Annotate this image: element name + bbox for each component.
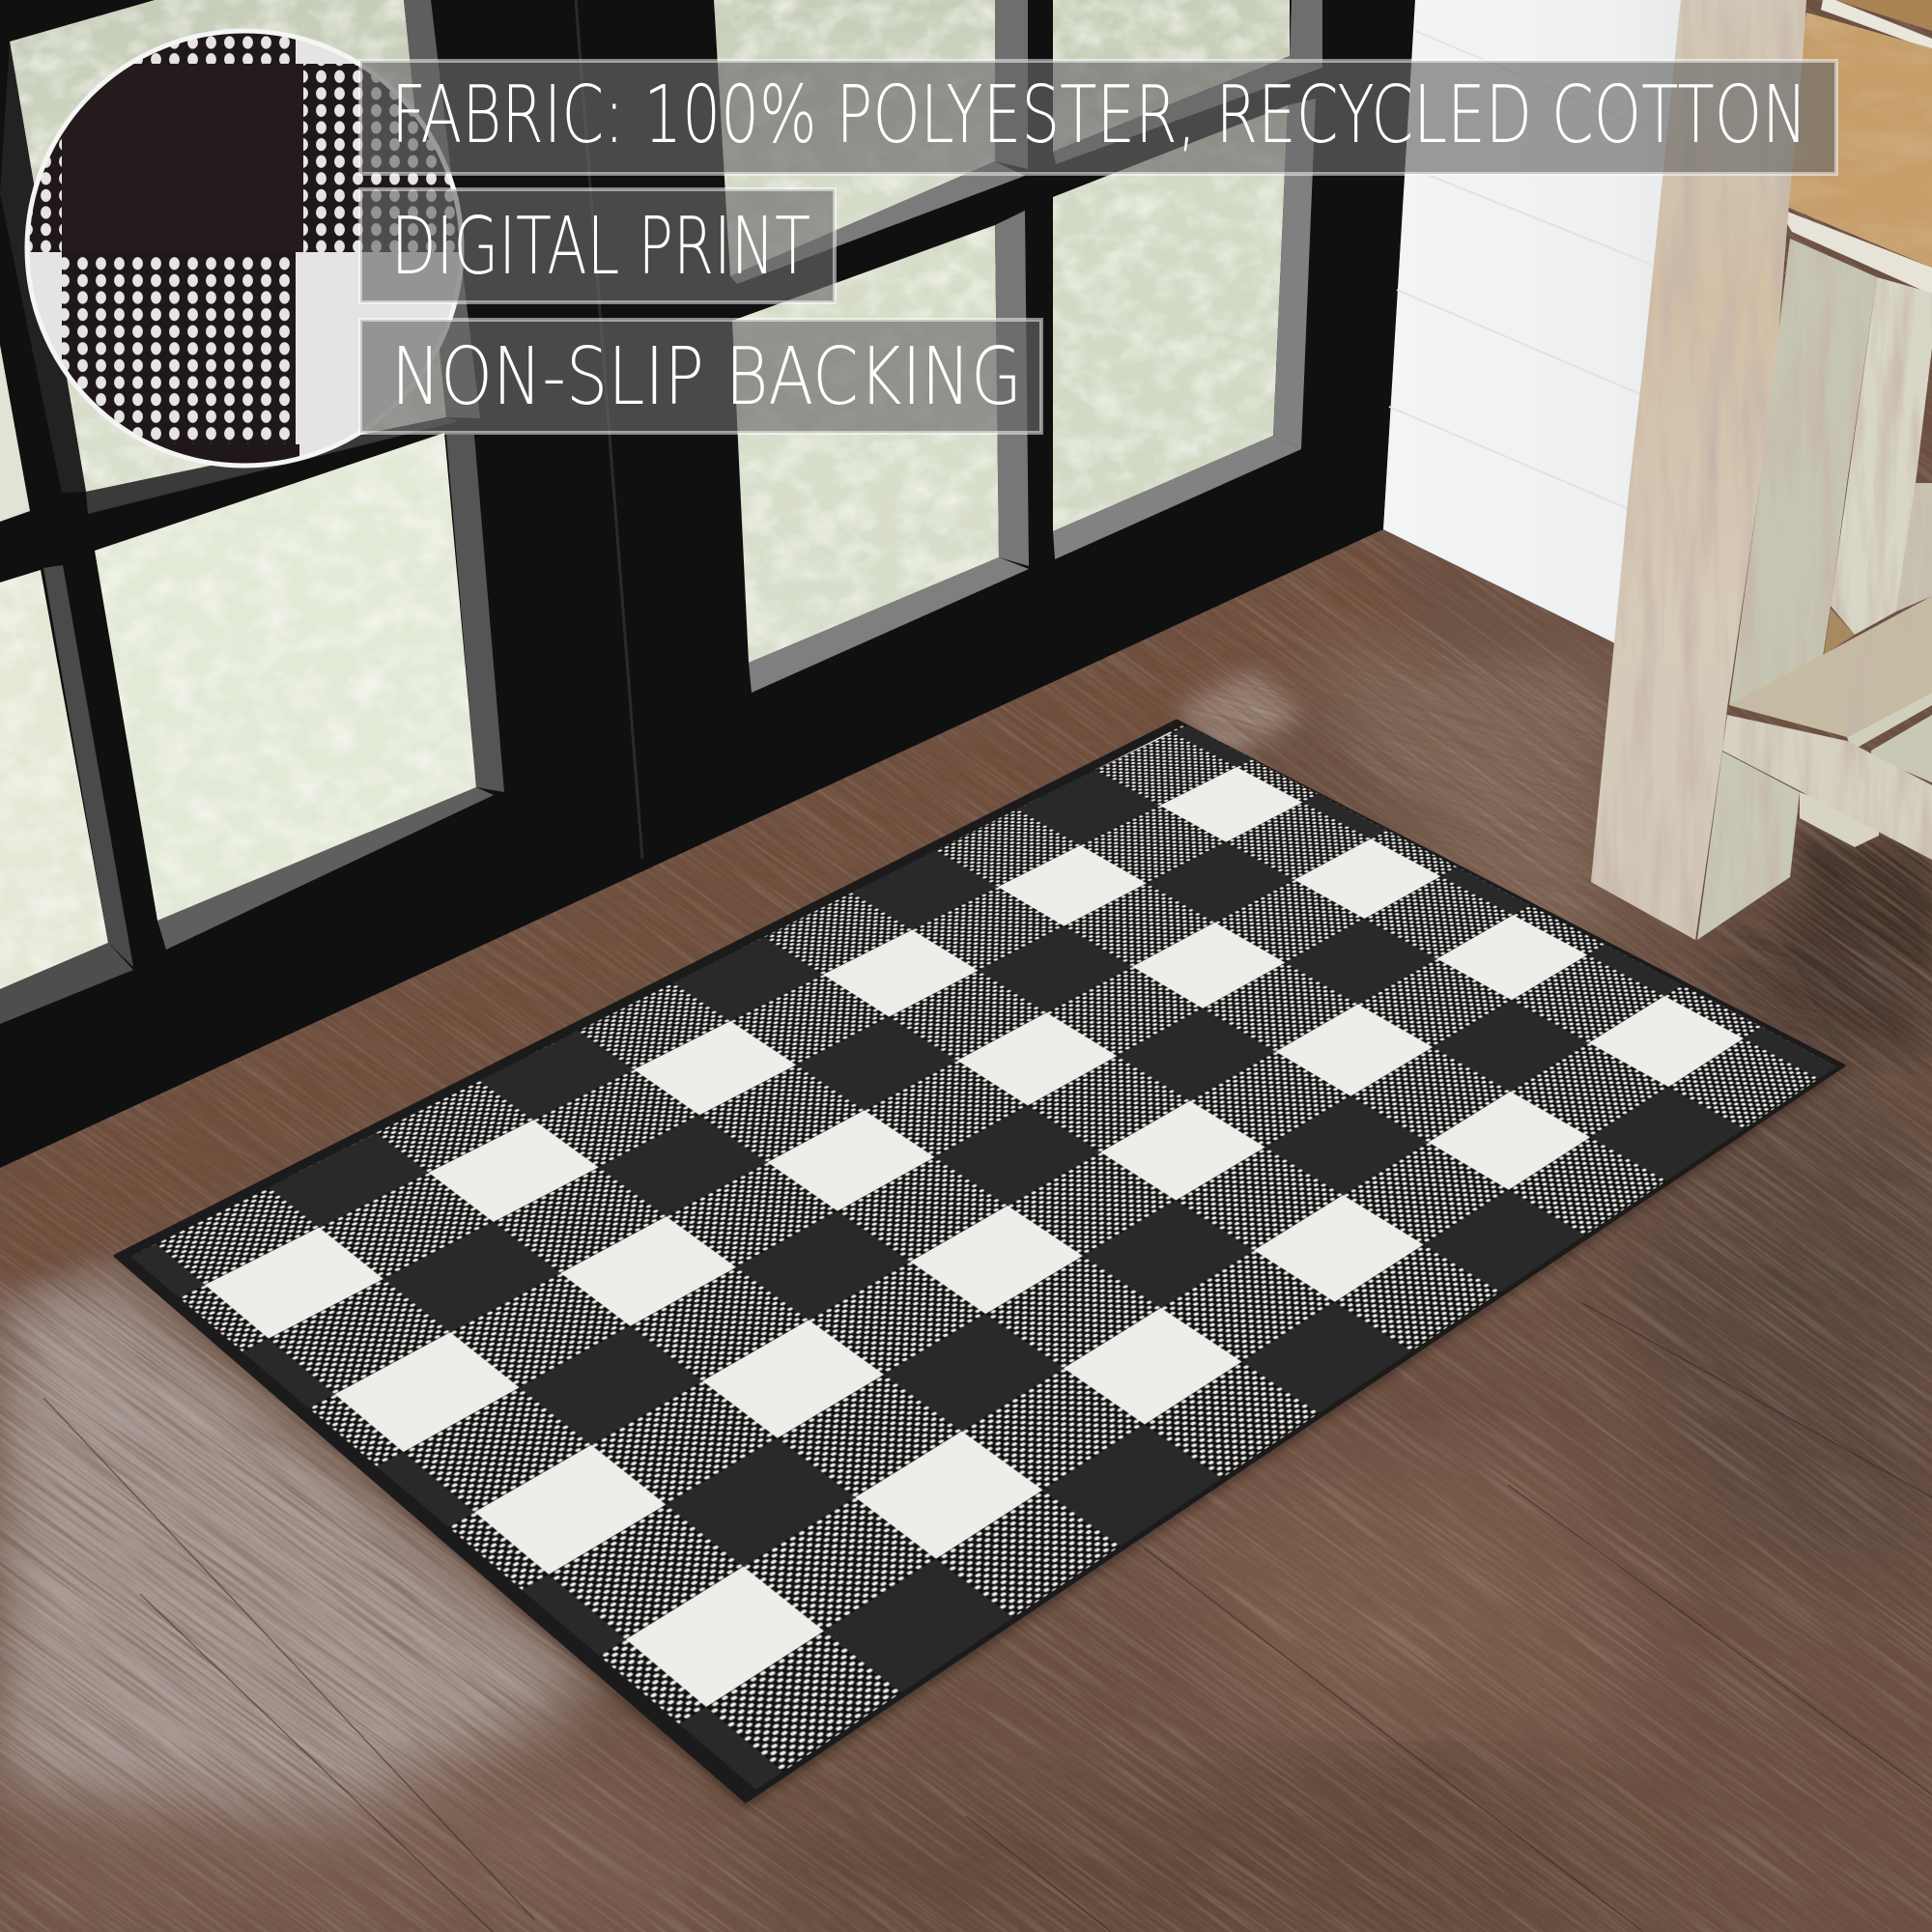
label: non-slip backing: NON-SLIP BACKING bbox=[391, 331, 1022, 423]
glass pane: top left bbox=[10, 0, 446, 492]
overlay: swatch and feature labels bbox=[25, 29, 1838, 468]
glass pane: top right bbox=[1053, 0, 1290, 152]
label: non-slip backing bbox=[360, 320, 1041, 433]
glass pane: far left upper bbox=[0, 345, 30, 522]
bench: post side upper bbox=[1729, 239, 1877, 705]
buffalo check rug bbox=[131, 724, 1837, 1789]
rug shadow and edge bbox=[115, 721, 1847, 1808]
label: digital print bbox=[360, 189, 835, 302]
bench: under-shelf bbox=[1871, 715, 1932, 782]
glass pane: lower right bbox=[1053, 105, 1288, 531]
whitewashed bench bbox=[1591, 0, 1932, 940]
bench: shelf top bbox=[1729, 596, 1932, 737]
glass pane: top middle bbox=[714, 0, 995, 276]
fabric swatch circle bbox=[27, 31, 462, 466]
door frame bbox=[0, 0, 1415, 1168]
bench: front post bbox=[1591, 0, 1806, 940]
bench: upper wood rail bbox=[1835, 0, 1932, 31]
bench: back foot bbox=[1800, 792, 1879, 847]
wall with shiplap bbox=[1383, 0, 1690, 647]
bench: shelf edge bbox=[1847, 693, 1932, 751]
bench: wooden seat bbox=[1777, 13, 1932, 268]
bench: top trim bbox=[1821, 0, 1932, 50]
label: digital print: DIGITAL PRINT bbox=[391, 201, 810, 293]
glass pane: lower middle bbox=[732, 225, 999, 663]
bench: seat trim bbox=[1777, 208, 1932, 295]
bench: shelf rail bbox=[1722, 715, 1932, 860]
bench: back legs bbox=[1896, 483, 1932, 611]
window sills and reveals bbox=[0, 0, 1322, 1024]
glass pane: far left lower bbox=[0, 570, 108, 989]
bench: gap bbox=[1824, 609, 1855, 655]
glass pane: bottom left bbox=[95, 433, 476, 921]
bench: post side lower bbox=[1697, 752, 1800, 940]
